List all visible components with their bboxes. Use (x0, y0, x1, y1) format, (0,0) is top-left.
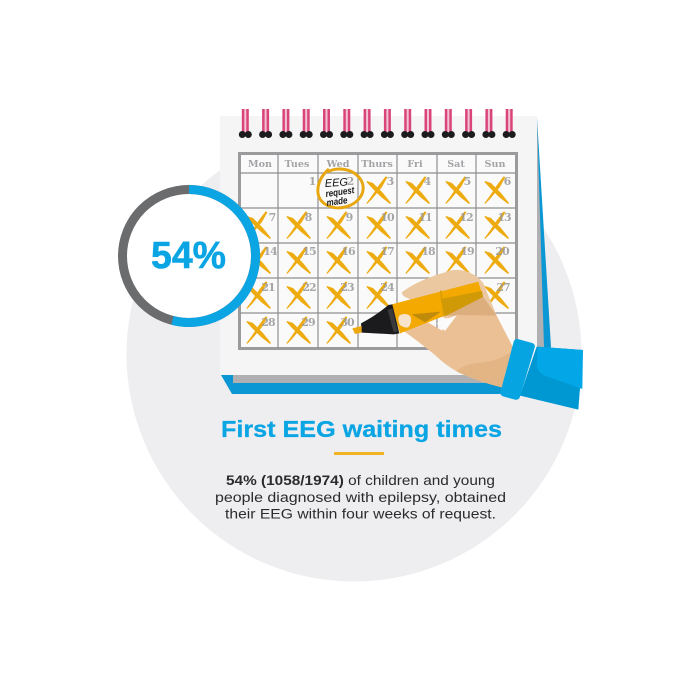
circled note: EEG request made: made (326, 195, 349, 209)
day numbers: 9 (346, 211, 353, 224)
weekday headers (248, 159, 505, 170)
weekday headers: Thurs (361, 159, 393, 170)
hand holding highlighter (352, 270, 583, 410)
calendar back stand (221, 118, 551, 394)
weekday headers: Wed (326, 159, 350, 170)
day numbers: 1 (309, 175, 316, 188)
finger shadow (445, 296, 497, 316)
day numbers: 17 (380, 245, 394, 258)
description: 54% (1058/1974) of children and young (226, 473, 495, 488)
day numbers: 23 (340, 281, 354, 294)
spiral rings (239, 109, 516, 138)
circled note: EEG request made: EEG (324, 176, 349, 190)
day numbers: 10 (380, 211, 395, 224)
weekday headers: Tues (285, 159, 309, 170)
day numbers: 16 (341, 245, 356, 258)
thumbnail (398, 314, 411, 328)
day numbers: 28 (261, 316, 276, 329)
day numbers: 14 (263, 245, 278, 258)
day numbers: 12 (459, 211, 473, 224)
background circle (126, 126, 582, 582)
day numbers: 8 (305, 211, 313, 224)
weekday headers: Mon (248, 159, 272, 170)
weekday headers: Sat (447, 159, 465, 170)
highlighter body (352, 282, 483, 334)
calendar (220, 109, 551, 394)
day numbers: 29 (301, 316, 315, 329)
day numbers: 22 (302, 281, 316, 294)
day numbers: 11 (418, 211, 432, 224)
calendar grid (240, 154, 516, 348)
day numbers: 6 (504, 175, 512, 188)
palm and thumb (398, 313, 513, 387)
weekday headers: Sun (485, 159, 505, 170)
day numbers: 30 (340, 316, 355, 329)
palm shadow (457, 352, 511, 387)
day numbers: 4 (424, 175, 432, 188)
circled note: EEG request made (318, 169, 363, 209)
day numbers: 21 (261, 281, 275, 294)
calendar page (220, 116, 537, 375)
day numbers: 18 (421, 245, 436, 258)
day numbers: 2 (347, 175, 354, 188)
percentage value: 54% (151, 235, 226, 277)
day numbers: 20 (495, 245, 510, 258)
day numbers: 19 (460, 245, 474, 258)
description (215, 473, 506, 522)
sleeve cuff (500, 339, 535, 400)
day numbers: 3 (387, 175, 394, 188)
title: First EEG waiting times (221, 416, 502, 442)
divider (334, 452, 384, 455)
day numbers: 24 (380, 281, 395, 294)
description: people diagnosed with epilepsy, obtained (215, 490, 506, 505)
cross marks (246, 176, 509, 344)
finger gap (437, 315, 457, 331)
percentage ring (122, 189, 256, 322)
day numbers: 7 (269, 211, 276, 224)
day numbers: 5 (464, 175, 471, 188)
weekday headers: Fri (407, 159, 423, 170)
day numbers: 15 (302, 245, 316, 258)
day numbers (261, 175, 512, 329)
sleeve (520, 347, 583, 410)
circled note: EEG request made: request (325, 185, 356, 200)
day numbers: 13 (497, 211, 511, 224)
day numbers: 27 (496, 281, 510, 294)
upper fingers (402, 270, 497, 318)
description: their EEG within four weeks of request. (225, 506, 496, 522)
